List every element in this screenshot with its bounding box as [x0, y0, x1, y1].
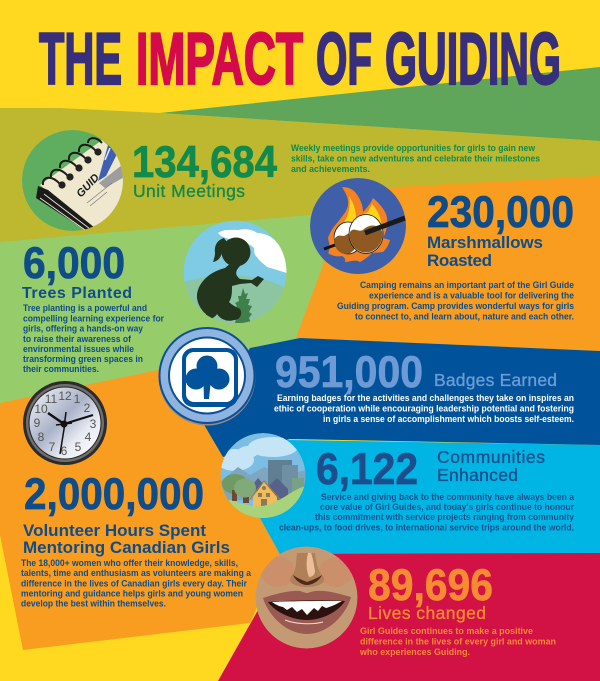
text: badges description: Earning badges for the activities and challenges they take on inspires an — [277, 393, 574, 403]
icon: wall clock: 5 — [75, 440, 82, 454]
text: camping description — [337, 280, 574, 322]
text: communities description — [279, 492, 575, 532]
text: tree planting description: their communities. — [23, 364, 99, 374]
text: tree planting description: compelling learning experience for — [23, 314, 164, 324]
text: lives changed description: who experiences Guiding. — [359, 647, 470, 657]
text: communities description: this commitment with service projects ranging from community — [315, 512, 575, 522]
icon: wall clock — [23, 381, 107, 465]
stat: unit meetings: 134,684 — [132, 138, 277, 187]
title — [39, 19, 561, 100]
text: camping description: experience and is a valuable tool for delivering the — [369, 290, 574, 300]
icon: toasting marshmallows — [310, 178, 406, 274]
panel: blue badges — [203, 338, 600, 457]
icon: wall clock: 2 — [84, 401, 91, 415]
stat: volunteer hours: Volunteer Hours Spent — [23, 521, 206, 540]
text: volunteers description: difference in the lives of Canadian girls every day. Their — [21, 578, 247, 588]
stat: trees planted: 6,000 — [23, 239, 125, 288]
stat: volunteer hours: 2,000,000 — [24, 470, 204, 519]
icon: wall clock: 1 — [74, 392, 81, 406]
text: volunteers description: develop the best within themselves. — [21, 598, 166, 608]
icon: notebook and pen: GUID — [74, 172, 102, 200]
icon: wall clock: 3 — [90, 417, 97, 431]
title: THE — [39, 19, 122, 100]
text: camping description: to connect to, and learn about, nature and each other. — [355, 312, 574, 322]
panel: orange marshmallows — [296, 176, 600, 351]
icon: trefoil badge — [158, 327, 256, 426]
icon: notebook and pen — [22, 130, 123, 231]
stat: volunteer hours — [23, 470, 230, 557]
stat: communities enhanced — [316, 445, 545, 494]
stat: marshmallows roasted: Marshmallows — [427, 233, 543, 252]
text: unit meetings description — [291, 143, 540, 174]
icon: wall clock: 6 — [61, 444, 68, 458]
icon: wall clock: 10 — [34, 402, 48, 416]
panel: cyan communities — [225, 439, 600, 556]
text: communities description: Service and giving back to the community have always been a — [321, 492, 575, 502]
panel: crimson lives — [218, 553, 600, 681]
icon: wall clock: 11 — [45, 392, 58, 406]
text: lives changed description: Girl Guides continues to make a positive — [360, 626, 533, 636]
text: tree planting description: to raise their awareness of — [23, 334, 132, 344]
text: camping description: Camping remains an important part of the Girl Guide — [360, 280, 574, 290]
panel: light green trees — [0, 212, 345, 420]
panel: dark green wedge — [160, 67, 600, 141]
icon: smiling mouth — [256, 546, 358, 648]
text: tree planting description: transforming green spaces in — [23, 354, 143, 364]
stat: marshmallows roasted: Roasted — [427, 251, 492, 270]
panel: orange volunteers — [0, 348, 281, 650]
text: volunteers description: mentoring and guidance helps girls and young women — [21, 588, 243, 598]
panel: olive band — [0, 108, 600, 260]
stat: lives changed: 89,696 — [368, 561, 493, 610]
text: unit meetings description: and achievements. — [291, 164, 370, 174]
icon: wall clock: 12 — [58, 389, 72, 403]
text: volunteers description: talents, time and enthusiasm as volunteers are making a — [21, 568, 252, 578]
text: unit meetings description: skills, take on new adventures and celebrate their milestones — [291, 154, 540, 164]
stat: communities enhanced: 6,122 — [316, 445, 418, 494]
stat: marshmallows roasted: 230,000 — [427, 188, 574, 237]
text: volunteers description — [21, 558, 252, 608]
stat: volunteer hours: Mentoring Canadian Girls — [23, 538, 230, 557]
text: camping description: Guiding program. Camp provides wonderful ways for girls — [337, 301, 574, 311]
text: badges description: ethic of cooperation while encouraging leadership potential and fostering — [274, 404, 574, 414]
icon: wall clock: 9 — [34, 416, 41, 430]
text: badges description — [274, 393, 574, 424]
stat: badges earned: 951,000 — [275, 348, 423, 397]
stat: trees planted: Trees Planted — [22, 285, 132, 302]
icon: community scene — [216, 433, 306, 520]
text: tree planting description: Tree planting is a powerful and — [23, 303, 147, 313]
stat: marshmallows roasted — [427, 188, 574, 270]
text: lives changed description: difference in the lives of every girl and woman — [360, 636, 556, 646]
text: unit meetings description: Weekly meetings provide opportunities for girls to gain new — [291, 143, 536, 153]
text: lives changed description — [359, 626, 556, 657]
title: OF — [316, 19, 372, 100]
title: IMPACT — [136, 19, 303, 100]
text: tree planting description: girls, offering a hands-on way — [23, 324, 144, 334]
text: volunteers description: The 18,000+ women who offer their knowledge, skills, — [21, 558, 238, 568]
icon: wall clock: 7 — [49, 440, 56, 454]
text: communities description: clean-ups, to food drives, to international service trips around the world. — [279, 522, 574, 532]
stat: badges earned — [275, 348, 557, 397]
stat: lives changed: Lives changed — [368, 603, 486, 623]
icon: wall clock: 8 — [38, 430, 45, 444]
text: tree planting description: environmental issues while — [23, 344, 134, 354]
text: communities description: core value of Girl Guides, and today's girls continue to honour — [320, 502, 574, 512]
icon: wall clock: 4 — [85, 430, 92, 444]
stat: unit meetings: Unit Meetings — [133, 181, 245, 201]
text: tree planting description — [23, 303, 164, 374]
stat: communities enhanced: Communities — [437, 447, 545, 467]
text: badges description: in girls a sense of accomplishment which boosts self-esteem. — [323, 414, 574, 424]
stat: communities enhanced: Enhanced — [437, 465, 518, 485]
stat: badges earned: Badges Earned — [434, 370, 557, 390]
icon: girl planting tree — [183, 220, 288, 325]
